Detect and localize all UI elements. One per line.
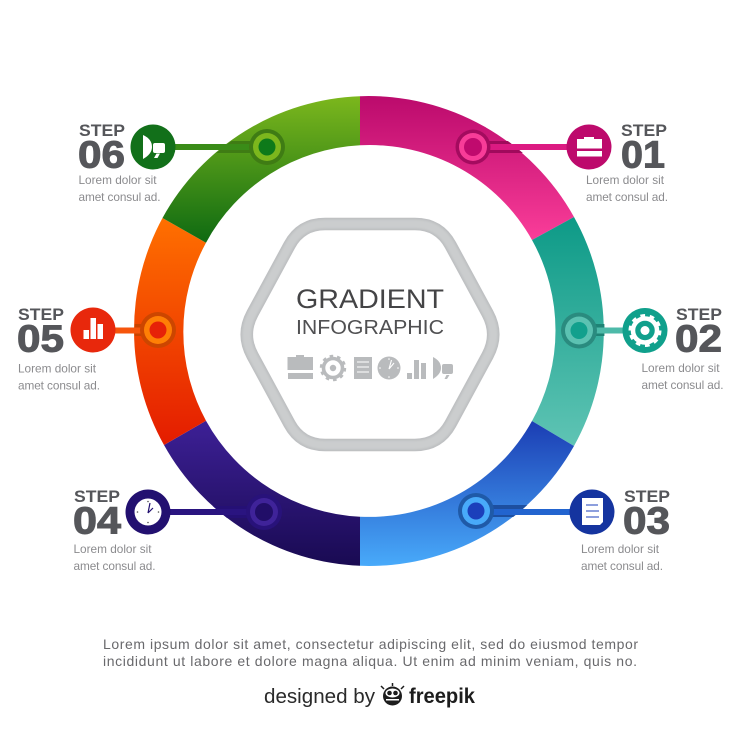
- node 02: [561, 312, 597, 348]
- connector 01: [490, 141, 567, 153]
- label 03: Lorem dolor sit: [581, 542, 660, 556]
- label 03: 03: [623, 500, 670, 542]
- node 05: [140, 312, 176, 348]
- credit: designed by freepik: freepik: [409, 685, 475, 708]
- icon: grey megaphone: [433, 357, 453, 379]
- step 05: [17, 306, 176, 392]
- label 05: 05: [17, 318, 64, 360]
- infographic canvas: [18, 96, 722, 708]
- connector 03: [493, 505, 570, 517]
- label 01: 01: [621, 134, 665, 176]
- title: INFOGRAPHIC: [296, 317, 444, 339]
- label 05: amet consul ad.: [18, 378, 100, 392]
- segment 05 orange: [134, 218, 206, 445]
- icon badge: bars: [70, 308, 116, 352]
- label 04: 04: [73, 500, 121, 542]
- icon: grey clock: [378, 356, 400, 380]
- step 01: [456, 122, 668, 204]
- label 04: Lorem dolor sit: [74, 542, 152, 556]
- label 06: amet consul ad.: [78, 190, 160, 204]
- segment 06 green: [162, 96, 360, 243]
- node 06: [249, 129, 285, 165]
- label 01: amet consul ad.: [586, 190, 668, 204]
- label 02: Lorem dolor sit: [642, 361, 720, 375]
- label 03: amet consul ad.: [581, 559, 663, 573]
- footer paragraph: incididunt ut labore et dolore magna aliqua. Ut enim ad minim veniam, quis no.: [103, 653, 637, 669]
- label 05: [17, 306, 100, 392]
- label 02: STEP: [676, 306, 722, 324]
- label 03: [581, 488, 670, 573]
- credit: designed by freepik: [264, 683, 475, 708]
- label 01: STEP: [621, 122, 667, 140]
- segment 01 pink: [360, 96, 574, 240]
- node 01: [456, 130, 490, 164]
- label 01: [586, 122, 668, 204]
- icon: grey briefcase: [288, 355, 313, 379]
- label 02: 02: [675, 318, 722, 360]
- label 06: Lorem dolor sit: [78, 173, 157, 187]
- label 05: STEP: [18, 306, 64, 324]
- icon badge: clock: [126, 490, 170, 534]
- central grey icon row: [288, 355, 453, 380]
- connector 04: [170, 506, 247, 518]
- label 03: STEP: [624, 488, 670, 506]
- icon badge: document: [570, 490, 614, 534]
- step 03: [458, 488, 670, 573]
- label 02: amet consul ad.: [642, 378, 724, 392]
- icon: freepik bee logo: [381, 683, 404, 706]
- step 04: [73, 488, 282, 573]
- segment 04 purple: [164, 421, 360, 566]
- ring: six gradient segments: [134, 96, 604, 566]
- label 02: [642, 306, 724, 392]
- node 04: [246, 494, 282, 530]
- icon badge: gear: [622, 308, 668, 353]
- node 03: [458, 493, 494, 529]
- footer paragraph: Lorem ipsum dolor sit amet, consectetur adipiscing elit, sed do eiusmod tempor: [103, 636, 638, 652]
- segment 02 teal: [532, 217, 604, 446]
- label 04: amet consul ad.: [74, 559, 156, 573]
- label 05: Lorem dolor sit: [18, 362, 97, 376]
- label 01: Lorem dolor sit: [586, 173, 665, 187]
- central hexagon: [247, 224, 493, 445]
- icon: grey gear: [321, 356, 345, 380]
- title: GRADIENT: [296, 284, 444, 314]
- icon: grey document: [354, 357, 372, 379]
- label 06: STEP: [79, 122, 125, 140]
- segment 03 blue: [360, 421, 574, 566]
- credit: designed by freepik: designed by: [264, 686, 375, 708]
- label 04: STEP: [74, 488, 120, 506]
- label 04: [73, 488, 156, 573]
- title: [296, 284, 444, 339]
- step 06: [78, 122, 285, 204]
- footer paragraph: [103, 636, 638, 669]
- label 06: 06: [78, 134, 125, 176]
- connector 06: [175, 141, 250, 153]
- icon: grey bars: [407, 360, 426, 379]
- icon badge: megaphone: [130, 124, 176, 170]
- icon badge: briefcase: [566, 124, 612, 170]
- label 06: [78, 122, 160, 204]
- connector 05: [115, 324, 141, 336]
- connector 02: [596, 324, 623, 336]
- step 02: [561, 306, 724, 392]
